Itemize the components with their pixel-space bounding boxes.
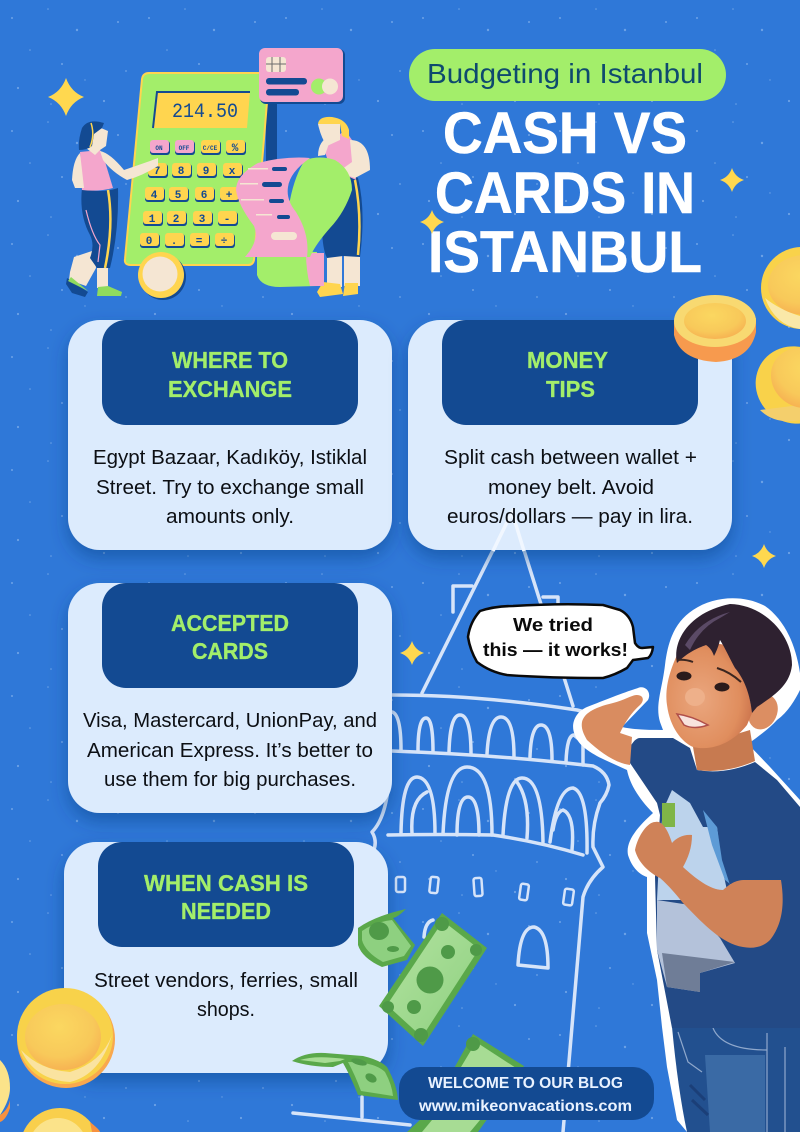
icon: sparkle stars: [48, 78, 776, 665]
calculator display: [153, 92, 250, 128]
text: when cash is needed: Street vendors, ferries, small: [94, 969, 358, 992]
title: CARDS IN: [435, 161, 695, 226]
heading: when cash is needed: NEEDED: [181, 898, 271, 924]
bill: large: [379, 913, 487, 1046]
boy nose: [685, 688, 705, 706]
subtitle pill: Budgeting in Istanbul: [427, 58, 703, 89]
coin: right upper: [761, 247, 800, 329]
calculator keys: 1: [149, 214, 156, 226]
heading: when cash is needed: WHEN CASH IS: [144, 870, 308, 896]
calculator keys: .: [171, 236, 177, 248]
bill: curled lower: [292, 1053, 398, 1100]
tower spire tip over card: [493, 512, 524, 551]
text: money tips: Split cash between wallet +: [444, 446, 697, 469]
heading: money tips: [442, 320, 698, 425]
heading: accepted cards: ACCEPTED: [171, 610, 289, 636]
blog pill: WELCOME TO OUR BLOG: [428, 1075, 623, 1092]
boy hair: [676, 604, 792, 713]
panel: when cash is needed: [64, 842, 388, 1073]
receipt: [236, 158, 352, 287]
coin: [138, 252, 186, 300]
panel: money tips: [408, 320, 732, 551]
money bills: [292, 909, 524, 1132]
title: [428, 101, 702, 285]
coin: left edge: [0, 1060, 10, 1122]
calculator keys: %: [232, 143, 239, 155]
calculator body: [125, 73, 269, 265]
subtitle pill: [409, 49, 726, 101]
coin: on money tips card: [674, 295, 756, 362]
boy with thumbs pointing at himself: [573, 598, 800, 1132]
speech bubble: this — it works!: [483, 640, 628, 660]
calculator keys: 9: [203, 166, 209, 178]
coin: bottom edge: [20, 1108, 100, 1132]
heading: money tips: MONEY: [527, 347, 608, 373]
text: when cash is needed: [94, 969, 358, 1021]
calculator keys: [140, 140, 246, 248]
heading: where to exchange: WHERE TO: [172, 347, 288, 373]
calculator keys: 5: [175, 190, 182, 202]
illustration: calculator, card, people and receipt: [66, 48, 370, 300]
boy face: [666, 640, 752, 748]
text: where to exchange: Street. Try to exchange small: [96, 476, 364, 499]
text: accepted cards: use them for big purchases.: [104, 768, 356, 791]
calculator keys: -: [224, 214, 230, 226]
boy neck: [693, 730, 755, 771]
boy smile: [677, 714, 708, 728]
heading: accepted cards: CARDS: [192, 638, 268, 664]
boy white cutout outline: [573, 598, 800, 1132]
calculator keys: x: [229, 166, 236, 178]
heading: where to exchange: EXCHANGE: [168, 376, 292, 402]
bill: behind blog pill: [407, 1034, 524, 1132]
heading: money tips: TIPS: [546, 376, 595, 402]
blog pill: [399, 1067, 654, 1120]
blog pill: www.mikeonvacations.com: [418, 1098, 632, 1115]
text: money tips: euros/dollars — pay in lira.: [447, 505, 693, 528]
text: accepted cards: [83, 709, 377, 791]
title: CASH VS: [443, 101, 687, 166]
boy t-shirt: [630, 738, 800, 1028]
calculator keys: 6: [201, 190, 207, 202]
coin: bottom left large: [17, 988, 115, 1088]
heading: when cash is needed: [98, 842, 354, 947]
credit card: [259, 48, 345, 104]
title: ISTANBUL: [428, 220, 702, 285]
speech bubble: [468, 604, 653, 678]
calculator keys: 7: [154, 166, 160, 178]
calculator keys: =: [196, 236, 203, 248]
person: woman holding receipt: [317, 117, 370, 297]
text: accepted cards: American Express. It’s better to: [87, 739, 373, 762]
text: where to exchange: amounts only.: [166, 505, 294, 528]
calculator keys: 4: [151, 190, 158, 202]
heading: where to exchange: [102, 320, 358, 425]
person: woman pressing keys: [66, 121, 158, 297]
calculator keys: C/CE: [203, 145, 218, 152]
heading: accepted cards: [102, 583, 358, 688]
calculator stand: [266, 100, 277, 162]
coins: [0, 247, 800, 1132]
calculator keys: 3: [199, 214, 206, 226]
text: where to exchange: Egypt Bazaar, Kadıköy, Istiklal: [93, 446, 367, 469]
calculator keys: ÷: [221, 236, 228, 248]
coin: right lower: [740, 331, 800, 439]
text: accepted cards: Visa, Mastercard, UnionPay, and: [83, 709, 377, 732]
panel: where to exchange: [68, 320, 392, 550]
boy eyes and brows: [676, 660, 741, 692]
boy thumb hand: [582, 695, 643, 765]
calculator keys: OFF: [179, 145, 190, 152]
calculator keys: 0: [146, 236, 152, 248]
calculator keys: 8: [178, 166, 185, 178]
text: when cash is needed: shops.: [197, 998, 255, 1021]
calculator keys: ON: [155, 145, 163, 152]
calculator display: 214.50: [172, 101, 238, 124]
calculator keys: +: [226, 190, 233, 202]
text: money tips: [444, 446, 697, 528]
text: money tips: money belt. Avoid: [488, 476, 654, 499]
panel: accepted cards: [68, 583, 392, 813]
calculator keys: 2: [173, 214, 179, 226]
bill: curled top: [358, 909, 415, 967]
speech bubble: We tried: [513, 615, 593, 635]
boy ear: [743, 690, 783, 734]
text: where to exchange: [93, 446, 367, 528]
Galata tower outline: [293, 512, 609, 1132]
boy arm and fist: [635, 822, 783, 948]
boy hair highlight: [685, 612, 730, 650]
boy jeans: [672, 1027, 800, 1132]
